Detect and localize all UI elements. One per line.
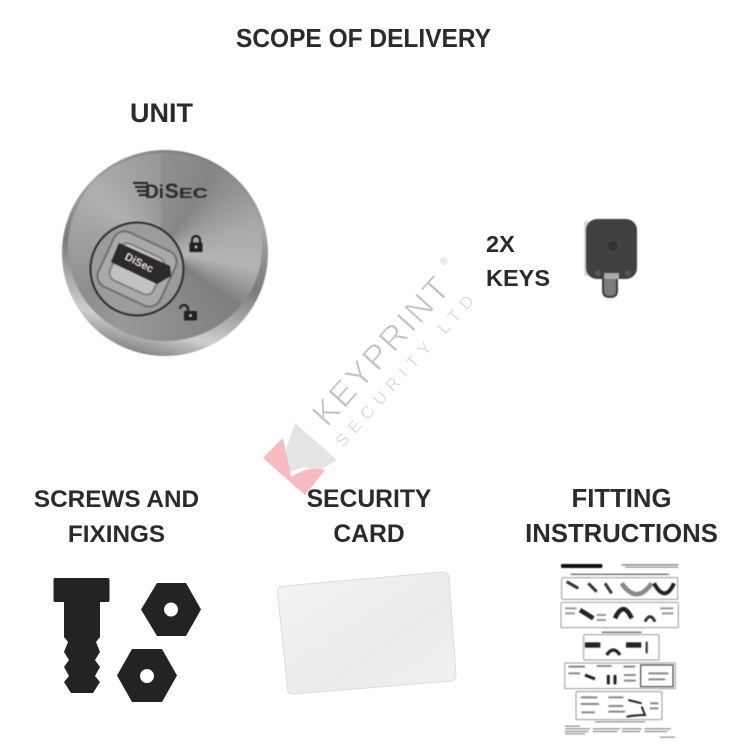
lock brushed face [68,153,262,341]
thumb turn [89,220,185,317]
title: SCOPE OF DELIVERY [236,23,491,53]
thumb turn: DiSec [123,251,155,276]
step panel 2 [561,602,678,628]
heading: 2x keys [486,231,550,291]
heating process heading [602,632,642,633]
step panel 4 [565,663,675,689]
upper nut [141,583,201,636]
heading: security card: CARD [333,521,405,548]
heading: security card: SECURITY [307,486,431,513]
fitting instructions sheet [560,563,680,738]
step panel 1 [562,578,678,599]
screw [54,578,110,693]
heading: fitting instructions [525,485,718,548]
icon: locked padlock [188,234,204,253]
panel: lock unit [61,149,269,357]
sheet header [561,564,678,575]
heading: 2x keys: 2X [486,231,515,257]
heading: screws and fixings: SCREWS AND [34,486,199,513]
security card image [277,572,456,694]
heading: fitting instructions: INSTRUCTIONS [525,520,718,548]
lock body rim [62,150,268,356]
icon: unlocked padlock [178,303,198,322]
heading: 2x keys: KEYS [486,265,550,291]
heading: screws and fixings [34,486,199,548]
heading: security card [307,486,431,548]
watermark: Keyprint Security: KEYPRINT [305,270,457,433]
lower nut [117,649,177,702]
icon: screw and nuts [54,578,201,702]
sheet footer [565,721,675,738]
icon: key fob [584,218,638,299]
step panel 3 [584,635,659,660]
step panel 5 [576,692,662,720]
heading: fitting instructions: FITTING [572,485,671,513]
heading: unit: UNIT [130,98,193,128]
watermark: Keyprint Security: ® [438,255,452,268]
heading: screws and fixings: FIXINGS [68,521,165,548]
watermark: Keyprint Security: SECURITY LTD [332,292,478,451]
